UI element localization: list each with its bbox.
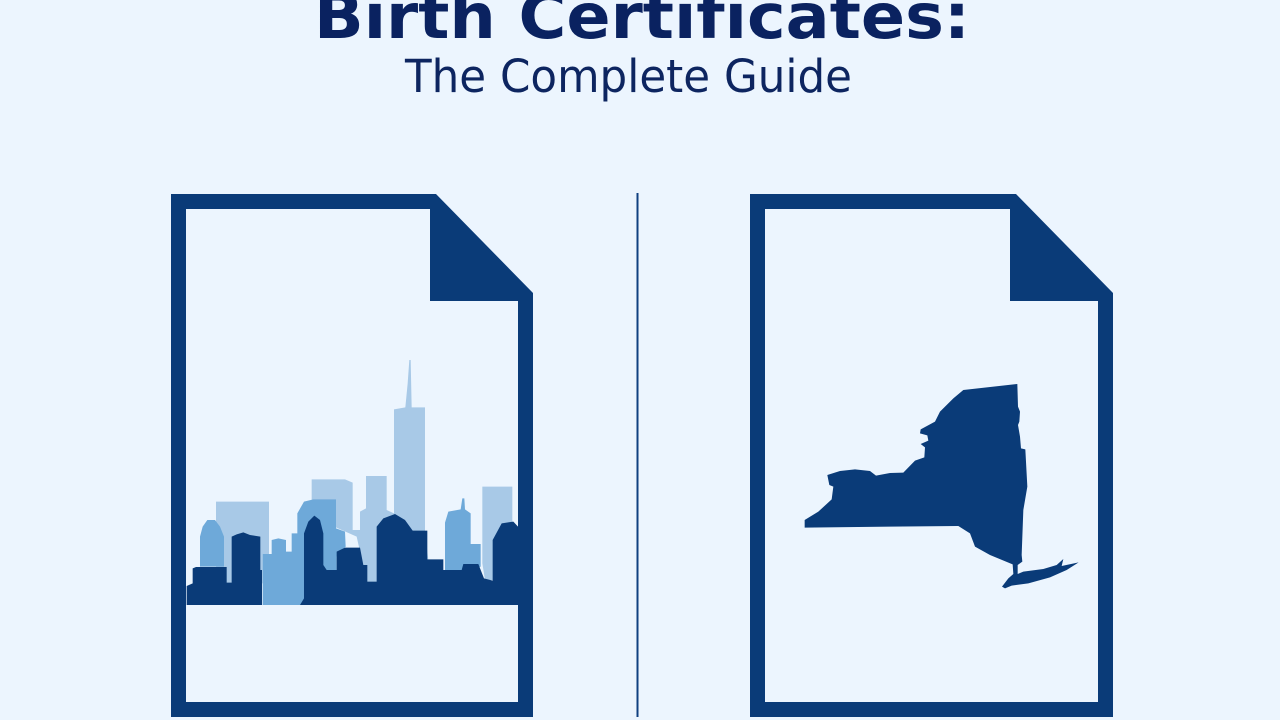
divider (636, 193, 638, 717)
subtitle: The Complete Guide (404, 50, 852, 103)
icon: document outline left (171, 194, 533, 717)
panel: city document (171, 194, 533, 717)
skyline: far buildings (216, 360, 512, 583)
illustration: city skyline (187, 360, 518, 605)
skyline: near buildings (187, 514, 518, 605)
skyline: middle buildings (200, 498, 481, 605)
panel: state document (750, 194, 1113, 717)
icon: New York State map (805, 384, 1079, 588)
icon: document outline right (750, 194, 1113, 717)
